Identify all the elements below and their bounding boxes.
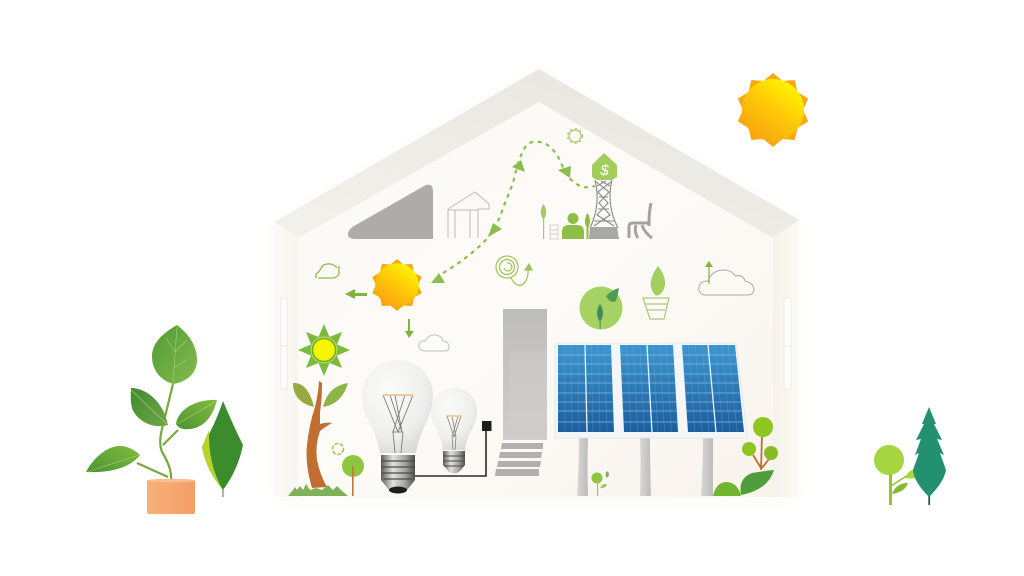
stems [137,384,178,480]
icon: green flower sun [298,324,350,376]
icon: grass [288,484,348,496]
leaf veins [87,327,217,472]
icon: three ball plant [713,417,778,496]
dollar sign: $ [599,162,609,179]
left middle leaf [131,388,168,426]
icon: person [562,213,584,239]
photovoltaic cells [555,343,750,435]
icon: cloud recycle outline [316,264,339,278]
icon: small light bulb [431,388,477,474]
lower left leaf [86,446,140,472]
icon: door [503,309,547,440]
icon: potted leaf [643,266,669,319]
icon: pine tree right [913,407,946,505]
icon: terracotta pot [147,479,195,514]
arrow: dashed energy path [431,142,595,283]
icon: middle sun [372,259,422,311]
tower lattice [590,180,618,228]
dark mound leaf [713,482,741,496]
icon: small recycle symbol [332,444,344,454]
panel supports [577,438,713,496]
icon: power cable and socket [415,421,492,476]
base tip [389,486,407,494]
left window [281,298,287,389]
icon: steps [495,443,543,476]
bus bars [585,345,716,432]
broad leaf [740,470,774,495]
icon: small house outline [448,192,489,238]
tower head [592,153,617,180]
back wall [298,102,773,497]
icon: small sprout [592,471,609,496]
icon: green leaf circle [580,286,622,330]
tower base [589,227,619,239]
arrow: left from sun [345,289,367,299]
left side wall [274,222,298,497]
icon: large sun [738,73,808,147]
top leaf [152,325,197,384]
icon: cloud with arrow [699,261,754,295]
right side wall [773,220,799,497]
icon: chair [629,203,652,238]
cell column lines [565,345,737,432]
icon: round tree right [874,445,925,505]
filament [383,395,413,453]
roof underside band [274,69,799,238]
icon: small gear [568,128,582,144]
house glow [274,69,799,502]
chart: solar panel array [555,343,750,496]
arrowhead lower [488,223,502,237]
arrow: down from sun [405,319,414,338]
icon: sprout and spoon leaves [541,204,590,239]
icon: brown tree with leaves [293,381,348,488]
icon: standalone leaf [202,401,243,497]
icon: small cloud [419,335,449,351]
arrowhead near sun [431,273,445,283]
icon: spiral with arrow [496,256,532,285]
arrowhead upper [512,160,525,172]
right middle leaf [176,400,217,429]
icon: small round tree [342,455,364,496]
icon: large light bulb [362,360,433,494]
icon: potted plant left [86,325,217,480]
cell row lines [555,355,750,422]
icon: water tower with dollar sign [589,153,619,239]
icon: grey roof triangle [348,185,433,239]
right window [784,298,791,389]
panel: house cutaway [274,69,799,502]
panel frame [555,343,747,438]
screw base [381,455,415,492]
arrowhead right [558,166,571,178]
